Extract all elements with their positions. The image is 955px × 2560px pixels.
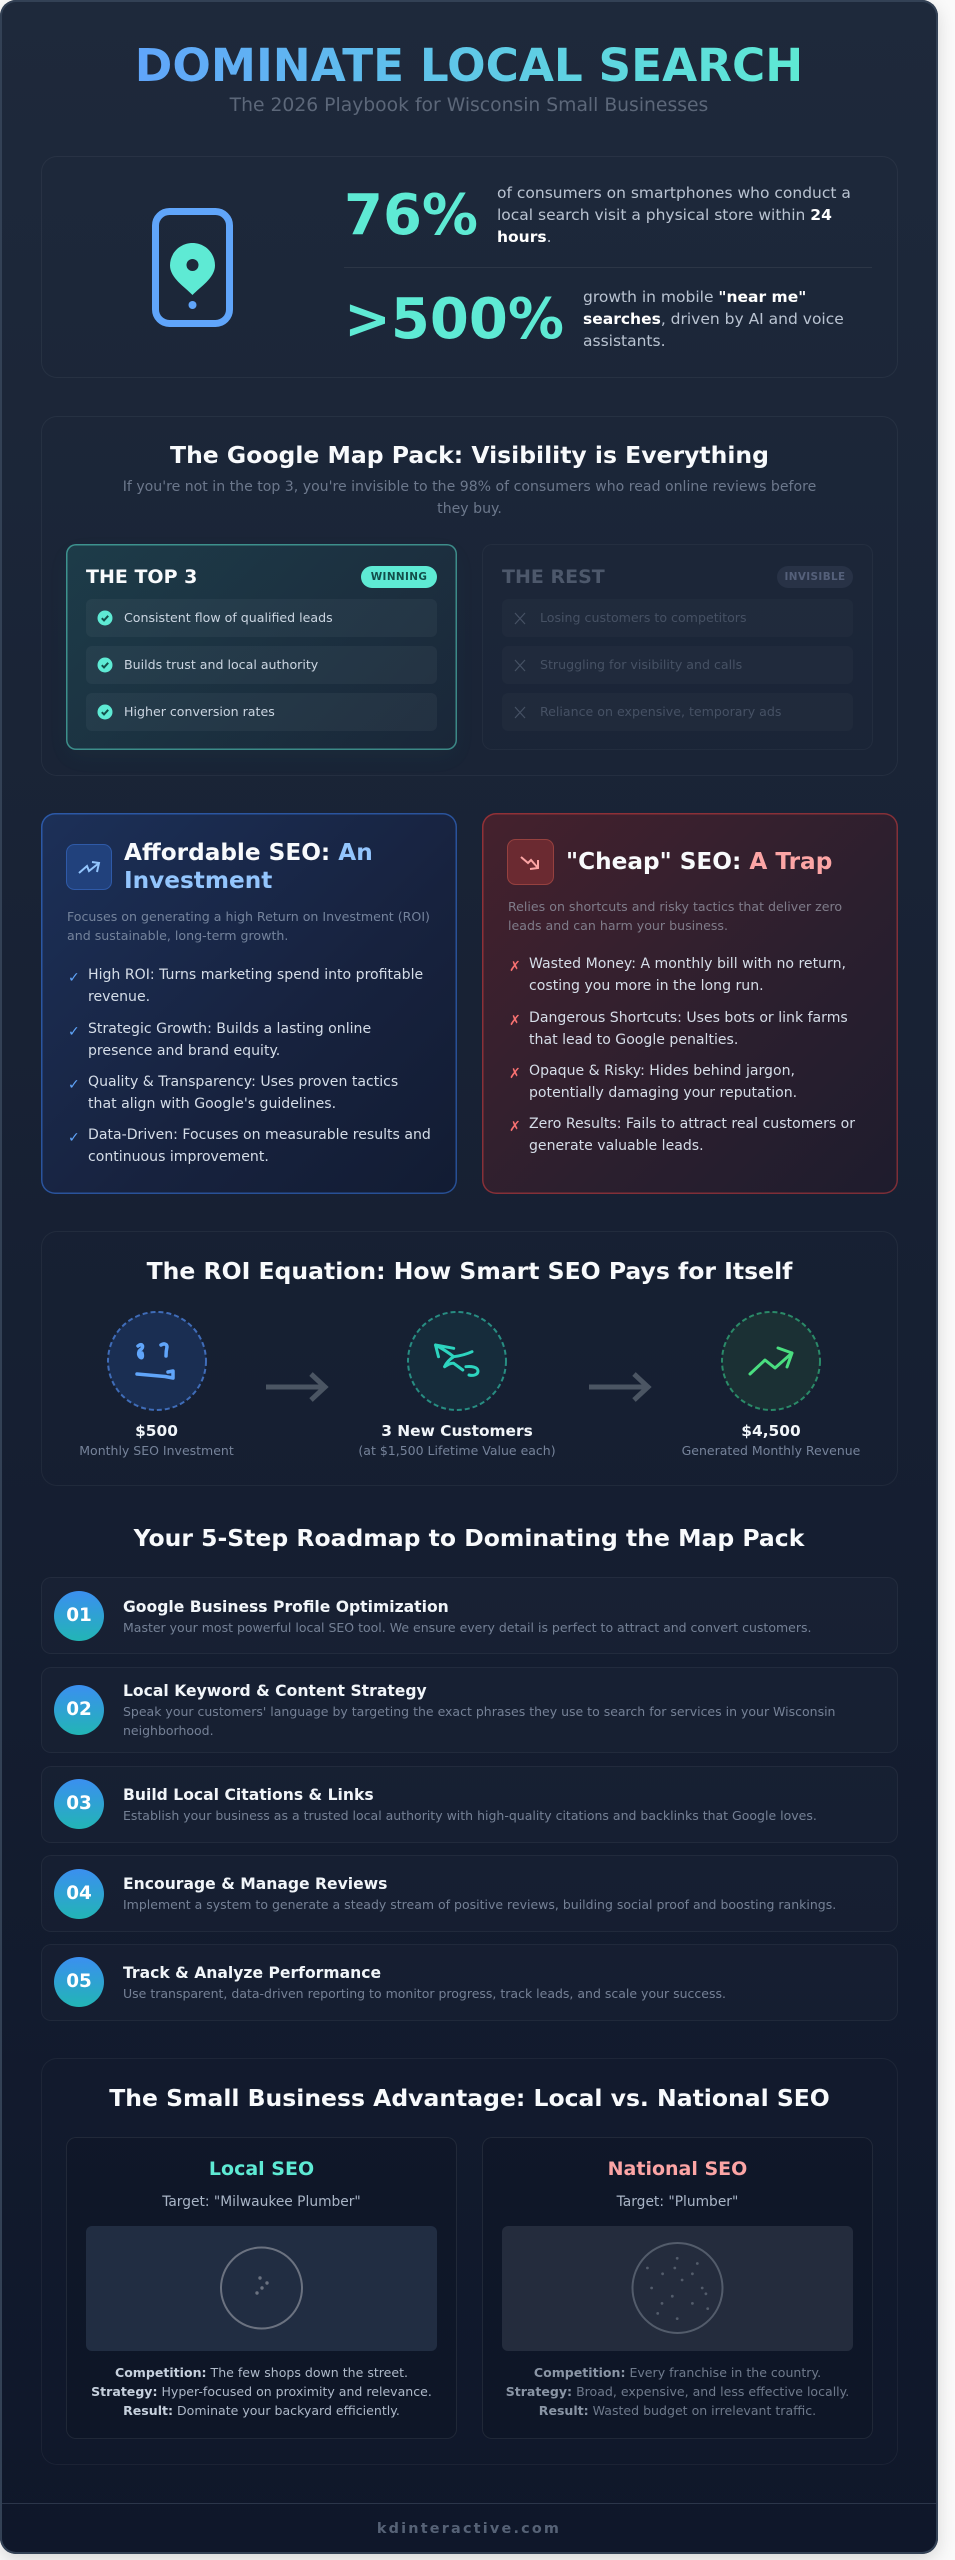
local heading: Local SEO xyxy=(209,2158,314,2180)
item: data-driven xyxy=(68,1127,431,1165)
item: struggling xyxy=(502,646,853,684)
item: dangerous shortcuts: Dangerous Shortcuts: Uses bots or link farms xyxy=(529,1010,848,1026)
item: conversion: Higher conversion rates xyxy=(124,704,275,719)
number 05: 05 xyxy=(66,1971,92,1992)
item: data-driven: Data-Driven: Focuses on measurable results and xyxy=(88,1127,431,1143)
item: zero results: generate valuable leads. xyxy=(529,1138,704,1154)
national details: Competition: Every franchise in the country. xyxy=(534,2365,821,2380)
item: strategic growth: presence and brand equity. xyxy=(88,1043,280,1059)
step 5 xyxy=(41,1944,898,2021)
local details xyxy=(91,2365,432,2418)
panel: roi equation xyxy=(41,1231,898,1486)
heading: Affordable SEO: An xyxy=(124,839,373,866)
step 3 xyxy=(41,1766,898,1842)
icon: customers circle xyxy=(407,1311,507,1411)
map: local radius xyxy=(86,2226,437,2351)
step description: neighborhood. xyxy=(123,1722,214,1738)
stat text: 76%: of consumers on smartphones who conduct a xyxy=(497,184,851,202)
stat: >500%: >500% xyxy=(344,287,564,352)
description xyxy=(508,899,842,933)
national heading: National SEO xyxy=(608,2158,747,2180)
national details: Result: Wasted budget on irrelevant traffic. xyxy=(539,2403,816,2418)
caption: Monthly SEO Investment xyxy=(79,1443,234,1458)
panel: the rest xyxy=(482,544,873,750)
value: $500 xyxy=(135,1422,178,1440)
value: 3 New Customers xyxy=(381,1422,533,1440)
panel: affordable seo: ✓ xyxy=(68,1024,80,1040)
step title: Build Local Citations & Links xyxy=(123,1786,374,1804)
stat text: 76% xyxy=(497,184,851,246)
item: wasted money: Wasted Money: A monthly bill with no return, xyxy=(529,956,846,972)
number 02 xyxy=(54,1685,104,1735)
stat text: >500% xyxy=(583,288,844,350)
item: dangerous shortcuts: that lead to Google penalties. xyxy=(529,1032,738,1048)
national target: Target: "Plumber" xyxy=(617,2194,738,2210)
step description: Use transparent, data-driven reporting to monitor progress, track leads, and scale your success. xyxy=(123,1986,726,2000)
item: data-driven: continuous improvement. xyxy=(88,1149,269,1165)
national details xyxy=(506,2365,849,2418)
item: zero results xyxy=(509,1116,856,1154)
item: opaque xyxy=(509,1063,797,1101)
stat text: >500%: searches, driven by AI and voice xyxy=(583,310,844,328)
step description xyxy=(123,1704,835,1738)
icon: phone with map pin xyxy=(152,208,233,327)
item: trust xyxy=(86,646,437,684)
icon: trend up xyxy=(66,844,112,890)
badge: winning xyxy=(361,566,437,588)
panel: google map pack xyxy=(41,416,898,776)
value: $4,500 xyxy=(741,1422,801,1440)
item: struggling: Struggling for visibility and calls xyxy=(540,657,742,672)
item: leads: Consistent flow of qualified leads xyxy=(124,610,333,625)
item: quality: Quality & Transparency: Uses proven tactics xyxy=(88,1074,398,1090)
description: and sustainable, long-term growth. xyxy=(67,928,288,943)
item: reliance xyxy=(502,693,853,731)
item: high roi: revenue. xyxy=(88,989,150,1005)
item: quality xyxy=(68,1074,398,1112)
item: wasted money xyxy=(509,956,846,994)
local details: Strategy: Hyper-focused on proximity and relevance. xyxy=(91,2384,432,2399)
number 03 xyxy=(54,1779,104,1829)
item: quality: that align with Google's guidelines. xyxy=(88,1096,336,1112)
badge: invisible xyxy=(777,566,853,588)
heading: the top 3: THE TOP 3 xyxy=(86,566,197,588)
number 02: 02 xyxy=(66,1699,92,1720)
title: DOMINATE LOCAL SEARCH xyxy=(135,39,803,92)
stat text: 76%: local search visit a physical store within 24 xyxy=(497,206,832,224)
item: losing: Losing customers to competitors xyxy=(540,610,747,625)
panel: affordable seo: ✓ xyxy=(68,1130,80,1146)
arrow 1 xyxy=(266,1372,328,1402)
panel: affordable seo: ✓ xyxy=(68,970,80,986)
item: zero results: Zero Results: Fails to attract real customers or xyxy=(529,1116,855,1132)
item: high roi: High ROI: Turns marketing spend into profitable xyxy=(88,967,423,983)
heading: roadmap: Your 5-Step Roadmap to Dominating the Map Pack xyxy=(134,1524,804,1552)
item: leads xyxy=(86,599,437,637)
stage: revenue xyxy=(682,1311,860,1458)
panel: local vs national xyxy=(41,2058,898,2465)
local details: Competition: The few shops down the street. xyxy=(115,2365,408,2380)
description: Focuses on generating a high Return on Investment (ROI) xyxy=(67,909,430,924)
item: strategic growth: Strategic Growth: Builds a lasting online xyxy=(88,1021,371,1037)
number 04: 04 xyxy=(66,1882,92,1904)
item: losing xyxy=(502,599,853,637)
caption: (at $1,500 Lifetime Value each) xyxy=(358,1443,556,1458)
item: opaque: potentially damaging your reputation. xyxy=(529,1085,797,1101)
panel: affordable seo: ✓ xyxy=(68,1077,80,1093)
panel: cheap seo: ✗ xyxy=(509,1013,521,1029)
step 1 xyxy=(41,1577,898,1654)
item: wasted money: costing you more in the long run. xyxy=(529,978,764,994)
number 04 xyxy=(54,1868,104,1918)
step title: Local Keyword & Content Strategy xyxy=(123,1682,427,1700)
step description: Establish your business as a trusted local authority with high-quality citations and backlinks that Google loves. xyxy=(123,1808,817,1822)
panel: cheap seo: ✗ xyxy=(509,1066,521,1082)
number 03: 03 xyxy=(66,1793,92,1814)
map: national radius xyxy=(502,2226,853,2351)
item: reliance: Reliance on expensive, temporary ads xyxy=(540,704,781,719)
icon: investment circle xyxy=(107,1311,207,1411)
panel: the top 3 xyxy=(66,544,457,750)
item: conversion xyxy=(86,693,437,731)
badge: invisible: INVISIBLE xyxy=(784,571,846,583)
heading: "Cheap" SEO: A Trap xyxy=(566,848,832,875)
icon: trend down xyxy=(507,839,554,885)
stage: customers xyxy=(358,1311,556,1458)
heading: The Small Business Advantage: Local vs. National SEO xyxy=(109,2084,830,2112)
panel: affordable seo xyxy=(41,813,457,1194)
step description: Master your most powerful local SEO tool. We ensure every detail is perfect to attract and convert customers. xyxy=(123,1620,811,1634)
panel: cheap seo xyxy=(482,813,898,1194)
description: Relies on shortcuts and risky tactics that deliver zero xyxy=(508,899,842,914)
number 01 xyxy=(54,1591,104,1641)
footer url: kdinteractive.com xyxy=(377,2521,561,2537)
stat: 76%: 76% xyxy=(344,183,478,248)
step title: Encourage & Manage Reviews xyxy=(123,1875,387,1893)
heading xyxy=(124,839,373,894)
icon: revenue circle xyxy=(721,1311,821,1411)
intro text xyxy=(123,479,816,517)
step description: Implement a system to generate a steady stream of positive reviews, building social proof and boosting rankings. xyxy=(123,1896,836,1912)
description xyxy=(67,909,430,943)
panel: cheap seo: ✗ xyxy=(509,959,521,975)
local details: Result: Dominate your backyard efficiently. xyxy=(123,2403,400,2418)
panel: national seo xyxy=(482,2137,873,2439)
footer xyxy=(2,2503,936,2552)
stat text: >500%: growth in mobile "near me" xyxy=(583,288,806,306)
step 2 xyxy=(41,1667,898,1753)
heading: The Google Map Pack: Visibility is Everything xyxy=(170,441,769,469)
panel: local search stats xyxy=(41,156,898,378)
caption: Generated Monthly Revenue xyxy=(682,1443,860,1458)
item: trust: Builds trust and local authority xyxy=(124,657,318,672)
step 4 xyxy=(41,1854,898,1932)
subtitle: The 2026 Playbook for Wisconsin Small Businesses xyxy=(230,95,708,116)
stage: investment xyxy=(79,1311,234,1458)
number 01: 01 xyxy=(66,1605,92,1626)
item: opaque: Opaque & Risky: Hides behind jargon, xyxy=(529,1063,795,1079)
stat text: >500%: assistants. xyxy=(583,332,666,350)
national details: Strategy: Broad, expensive, and less effective locally. xyxy=(506,2384,849,2399)
number 05 xyxy=(54,1957,104,2007)
description: leads and can harm your business. xyxy=(508,918,728,933)
panel: local seo xyxy=(66,2137,457,2439)
stat text: 76%: hours. xyxy=(497,228,552,246)
local target: Target: "Milwaukee Plumber" xyxy=(162,2194,361,2210)
item: dangerous shortcuts xyxy=(509,1010,848,1048)
step title: Track & Analyze Performance xyxy=(123,1964,381,1982)
item: strategic growth xyxy=(68,1021,371,1059)
step title: Google Business Profile Optimization xyxy=(123,1598,449,1616)
intro text: If you're not in the top 3, you're invisible to the 98% of consumers who read online reviews before xyxy=(123,479,816,495)
step description: Speak your customers' language by targeting the exact phrases they use to search for services in your Wisconsin xyxy=(123,1704,835,1718)
panel: cheap seo: ✗ xyxy=(509,1119,521,1135)
heading: Investment xyxy=(124,867,272,894)
arrow 2 xyxy=(589,1372,652,1402)
heading: The ROI Equation: How Smart SEO Pays for Itself xyxy=(147,1257,792,1285)
heading: the rest: THE REST xyxy=(502,566,605,588)
item: high roi xyxy=(68,967,423,1005)
badge: winning: WINNING xyxy=(371,571,427,583)
intro text: they buy. xyxy=(437,501,502,517)
